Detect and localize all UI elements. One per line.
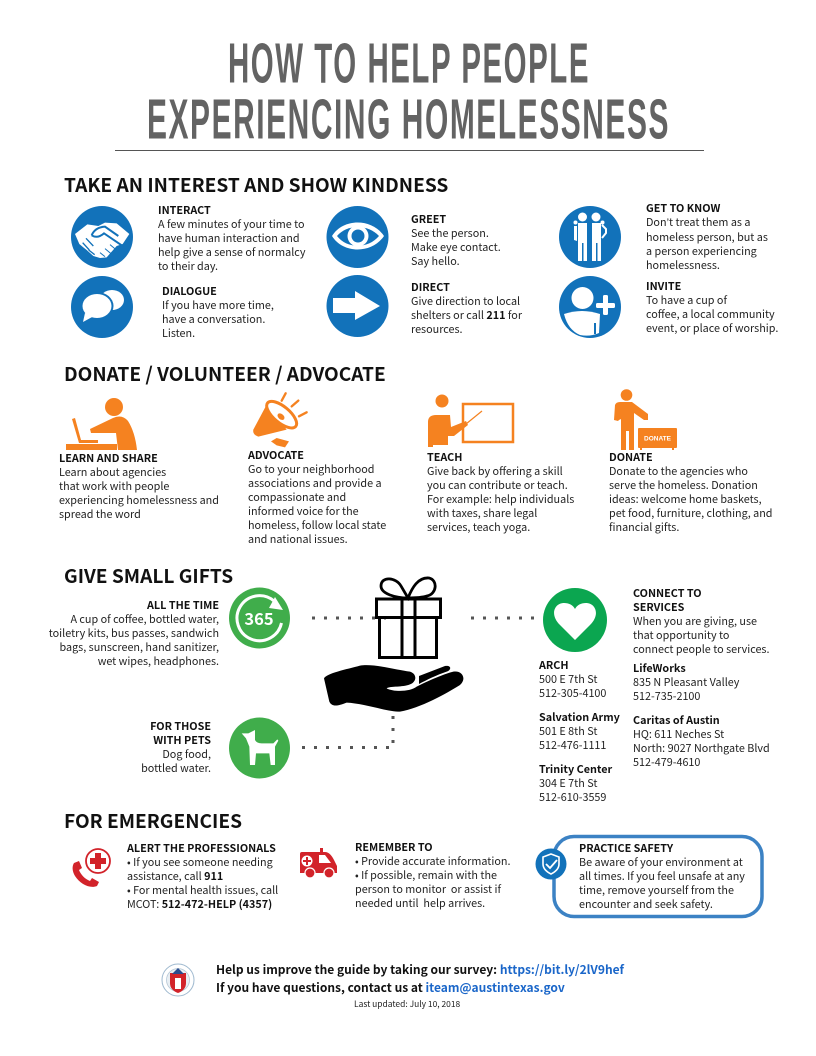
icon: two people [559, 206, 621, 268]
text: interact [158, 202, 306, 274]
text: advocate [248, 447, 386, 547]
text: practice safety: time, remove yourself from the [579, 882, 734, 898]
text: direct: resources. [411, 321, 463, 337]
text: alert the professionals: ALERT THE PROFESSIONALS [127, 840, 276, 856]
text: caritas of austin: 512-479-4610 [633, 754, 700, 770]
text: donate: DONATE [609, 449, 653, 465]
text: arch: ARCH [539, 657, 569, 673]
panel: for emergencies [64, 806, 764, 918]
text: remember to: person to monitor or assist if [355, 881, 501, 897]
text: connect to services: connect people to services. [633, 641, 769, 657]
text: learn and share: Learn about agencies [59, 464, 166, 480]
footer [162, 961, 624, 1010]
text: learn and share: experiencing homelessness and [59, 492, 219, 508]
text: teach: TEACH [427, 449, 462, 465]
text: direct: Give direction to local [411, 293, 520, 309]
text: salvation army: Salvation Army [539, 709, 620, 725]
text: get to know: a person experiencing [646, 243, 757, 259]
text: alert the professionals: • For mental health issues, call [127, 882, 278, 898]
text: invite: INVITE [646, 278, 681, 294]
text: dialogue: Listen. [162, 325, 195, 341]
text: teach [427, 449, 574, 535]
text: practice safety: PRACTICE SAFETY [579, 840, 673, 856]
text: dialogue: DIALOGUE [162, 283, 217, 299]
text: all the time: A cup of coffee, bottled water, [70, 611, 219, 627]
text: remember to: needed until help arrives. [355, 895, 485, 911]
text: lifeworks: 512-735-2100 [633, 688, 700, 704]
icon: heart [543, 588, 607, 652]
text: trinity center: 304 E 7th St [539, 775, 597, 791]
text: advocate: and national issues. [248, 531, 348, 547]
text: interact: INTERACT [158, 202, 211, 218]
text: all the time: ALL THE TIME [147, 597, 219, 613]
text: connect to services: CONNECT TO [633, 585, 702, 601]
text: practice safety: all times. If you feel unsafe at any [579, 868, 745, 884]
text: caritas of austin [633, 712, 770, 770]
text: connect to services: When you are giving, use [633, 613, 757, 629]
text: trinity center [539, 761, 612, 805]
icon: phone and medical cross [73, 849, 110, 887]
text: dialogue: have a conversation. [162, 311, 265, 327]
text: dialogue [162, 283, 274, 341]
text: advocate: ADVOCATE [248, 447, 304, 463]
text: survey line: Help us improve the guide by taking our survey: https://bit.ly/2lV9hef [216, 961, 624, 978]
text: connect to services [633, 585, 769, 657]
text: lifeworks: LifeWorks [633, 660, 686, 676]
text: learn and share: LEARN AND SHARE [59, 450, 158, 466]
icon: speech bubbles [71, 276, 133, 338]
text: greet: Say hello. [411, 253, 460, 269]
text: advocate: homeless, follow local state [248, 517, 386, 533]
heading: for emergencies: FOR EMERGENCIES [64, 806, 242, 834]
text: all the time: bags, sunscreen, hand sanitizer, [60, 639, 219, 655]
icon: arrow [326, 275, 388, 337]
title [115, 32, 704, 152]
text: alert the professionals: MCOT: 512-472-HELP (4357) [127, 896, 272, 912]
text: interact: to their day. [158, 258, 218, 274]
text: donate: Donate to the agencies who [609, 463, 748, 479]
text: greet: See the person. [411, 225, 489, 241]
text: alert the professionals: assistance, call 911 [127, 868, 223, 884]
text: get to know: GET TO KNOW [646, 200, 720, 216]
text: interact: A few minutes of your time to [158, 216, 305, 232]
text: learn and share: that work with people [59, 478, 169, 494]
text: remember to: • If possible, remain with the [355, 867, 497, 883]
icon: person with donation box [614, 389, 677, 450]
text: for those with pets: bottled water. [141, 760, 211, 776]
text: for those with pets [141, 718, 211, 776]
text: direct [411, 279, 522, 337]
text: caritas of austin: Caritas of Austin [633, 712, 720, 728]
icon: shield [536, 848, 566, 880]
text: advocate: compassionate and [248, 489, 346, 505]
icon: open hand [324, 665, 463, 712]
text: trinity center: Trinity Center [539, 761, 612, 777]
icon: 365 circle [229, 588, 290, 648]
text: greet: GREET [411, 211, 446, 227]
text: remember to [355, 839, 510, 911]
panel: donate / volunteer / advocate [59, 359, 772, 547]
text: invite: To have a cup of [646, 292, 727, 308]
dotted connectors [302, 618, 540, 748]
text: last updated: Last updated: July 10, 2018 [354, 998, 460, 1010]
text: greet [411, 211, 501, 269]
text: salvation army: 512-476-1111 [539, 737, 606, 753]
text: connect to services: that opportunity to [633, 627, 729, 643]
text: advocate: associations and provide a [248, 475, 382, 491]
icon: eye [326, 206, 388, 268]
heading: donate volunteer advocate: DONATE / VOLUNTEER / ADVOCATE [64, 359, 386, 387]
text: donate: serve the homeless. Donation [609, 477, 758, 493]
text: get to know: homeless person, but as [646, 229, 768, 245]
text: connect to services: SERVICES [633, 599, 684, 615]
text: invite [646, 278, 778, 336]
text: invite: coffee, a local community [646, 306, 775, 322]
text: greet: Make eye contact. [411, 239, 501, 255]
text: get to know [646, 200, 768, 273]
text: remember to: REMEMBER TO [355, 839, 433, 855]
text: for those with pets: Dog food, [162, 746, 211, 762]
icon: ambulance [300, 848, 337, 878]
text: lifeworks: 835 N Pleasant Valley [633, 674, 739, 690]
panel: give small gifts [49, 561, 770, 805]
text: direct: DIRECT [411, 279, 450, 295]
icon: dog [229, 718, 290, 778]
text: all the time: toiletry kits, bus passes, sandwich [49, 625, 219, 641]
text: donate: financial gifts. [609, 519, 679, 535]
panel: take an interest and show kindness [64, 170, 778, 341]
text: salvation army: 501 E 8th St [539, 723, 597, 739]
text: alert the professionals [127, 840, 278, 912]
icon: handshake [71, 206, 133, 268]
text: teach: services, teach yoga. [427, 519, 530, 535]
text: invite: event, or place of worship. [646, 320, 778, 336]
text: salvation army [539, 709, 620, 753]
icon: megaphone [253, 393, 307, 447]
icon: 365 circle: 365 [244, 606, 274, 630]
text: lifeworks [633, 660, 740, 704]
text: all the time: wet wipes, headphones. [98, 653, 219, 669]
text: caritas of austin: HQ: 611 Neches St [633, 726, 724, 742]
text: teach: with taxes, share legal [427, 505, 537, 521]
text: teach: For example: help individuals [427, 491, 574, 507]
text: arch: 512-305-4100 [539, 685, 606, 701]
text: contact line: If you have questions, contact us at iteam@austintexas.gov [216, 979, 565, 996]
icon: add person [559, 276, 621, 338]
text: trinity center: 512-610-3559 [539, 789, 606, 805]
text: all the time [49, 597, 219, 669]
text: alert the professionals: • If you see someone needing [127, 854, 273, 870]
text: learn and share [59, 450, 219, 522]
text: interact: have human interaction and [158, 230, 300, 246]
text: advocate: Go to your neighborhood [248, 461, 374, 477]
text: arch: 500 E 7th St [539, 671, 597, 687]
text: learn and share: spread the word [59, 506, 141, 522]
text: dialogue: If you have more time, [162, 297, 274, 313]
text: get to know: homelessness. [646, 257, 720, 273]
text: donate: ideas: welcome home baskets, [609, 491, 762, 507]
icon: gift box [376, 578, 440, 658]
text: interact: help give a sense of normalcy [158, 244, 305, 260]
text: remember to: • Provide accurate information. [355, 853, 510, 869]
icon: person with donation box: DONATE [644, 436, 672, 442]
text: practice safety: Be aware of your environment at [579, 854, 743, 870]
heading: give small gifts: GIVE SMALL GIFTS [64, 561, 233, 589]
text: teach: Give back by offering a skill [427, 463, 563, 479]
text: for those with pets: FOR THOSE [150, 718, 211, 734]
text: get to know: Don’t treat them as a [646, 214, 750, 230]
icon: teacher at board [428, 394, 513, 447]
text: teach: you can contribute or teach. [427, 477, 568, 493]
text: practice safety: encounter and seek safety. [579, 896, 713, 912]
practice safety box [554, 836, 762, 916]
text: direct: shelters or call 211 for [411, 307, 522, 323]
icon: city seal [162, 964, 194, 996]
text: caritas of austin: North: 9027 Northgate Blvd [633, 740, 770, 756]
heading: take an interest: TAKE AN INTEREST AND SHOW KINDNESS [64, 170, 448, 198]
text: donate [609, 449, 772, 535]
text: arch [539, 657, 606, 701]
text: donate: pet food, furniture, clothing, and [609, 505, 772, 521]
icon: person at laptop [66, 398, 137, 450]
text: for those with pets: WITH PETS [153, 732, 211, 748]
text: advocate: informed voice for the [248, 503, 359, 519]
text: practice safety [579, 840, 745, 912]
